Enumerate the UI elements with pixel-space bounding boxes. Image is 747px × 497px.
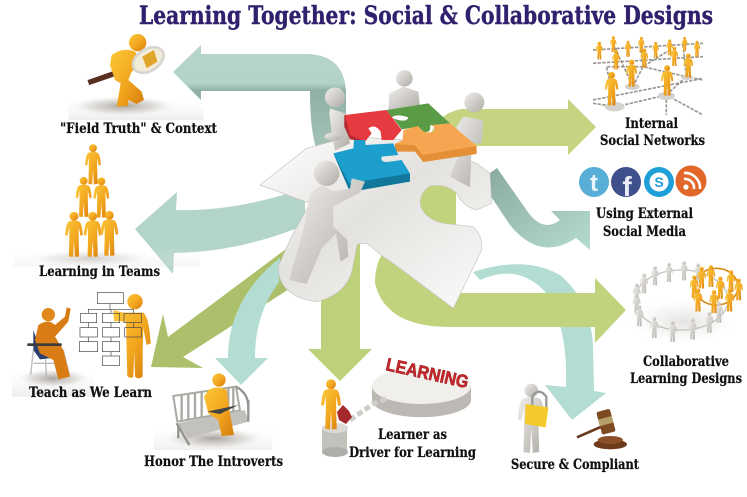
social media icons bbox=[579, 166, 706, 202]
center: puzzle and people bbox=[260, 70, 492, 308]
label: collaborative learning designs: Collaborative bbox=[643, 354, 729, 370]
person back bbox=[388, 70, 420, 110]
arrow: to honor the introverts bbox=[215, 258, 280, 385]
learner as driver image bbox=[321, 354, 471, 457]
label: learner as driver: Learner as bbox=[378, 427, 447, 443]
arrow: olive stem seen through puzzle notch bbox=[420, 185, 456, 245]
arrow: to learning in teams bbox=[135, 188, 305, 274]
person left bbox=[325, 87, 350, 151]
label: teach as we learn: Teach as We Learn bbox=[29, 385, 152, 401]
secure and compliant image bbox=[518, 384, 627, 453]
arrow: to secure and compliant bbox=[473, 264, 606, 420]
field truth image bbox=[67, 34, 203, 120]
label: learning in teams: Learning in Teams bbox=[39, 264, 160, 280]
icon: rss bbox=[676, 166, 706, 196]
icon: facebook: f bbox=[622, 171, 632, 202]
label: learner as driver bbox=[349, 427, 476, 461]
label: external social media: Using External bbox=[596, 206, 693, 222]
puzzle piece: blue bbox=[333, 140, 410, 192]
label: internal social networks: Social Networks bbox=[600, 133, 705, 149]
learner as driver image: LEARNING bbox=[384, 354, 470, 392]
collaborative designs image bbox=[626, 261, 743, 345]
internal networks image bbox=[593, 36, 703, 115]
label: secure and compliant: Secure & Compliant bbox=[511, 457, 640, 473]
person right bbox=[450, 92, 484, 187]
arrow: to external social media bbox=[480, 168, 590, 250]
label: learner as driver: Driver for Learning bbox=[349, 445, 476, 461]
label: internal social networks: Internal bbox=[625, 116, 678, 132]
arrow: to teach as we learn bbox=[151, 246, 300, 368]
arrow: to learner as driver bbox=[308, 240, 372, 381]
puzzle piece: green bbox=[387, 103, 450, 132]
honor the introverts image bbox=[154, 373, 272, 450]
label: honor the introverts: Honor The Introverts bbox=[144, 454, 283, 470]
puzzle piece: red bbox=[344, 110, 402, 142]
arrow: to field truth bbox=[173, 45, 346, 165]
arrow: to collaborative designs bbox=[375, 240, 626, 343]
icon: twitter: t bbox=[590, 170, 598, 197]
label: internal social networks bbox=[600, 116, 705, 149]
label: external social media: Social Media bbox=[603, 224, 686, 240]
teach as we learn image bbox=[12, 293, 151, 397]
puzzle piece: orange bbox=[395, 123, 477, 162]
arrow: to internal social networks bbox=[430, 99, 596, 155]
white puzzle piece bbox=[260, 137, 492, 308]
person front bbox=[289, 161, 365, 284]
label: field truth: "Field Truth" & Context bbox=[60, 121, 218, 137]
learning in teams image bbox=[13, 144, 200, 267]
label: external social media bbox=[596, 206, 693, 240]
label: collaborative learning designs bbox=[630, 354, 742, 387]
icon: skype: S bbox=[654, 174, 664, 190]
